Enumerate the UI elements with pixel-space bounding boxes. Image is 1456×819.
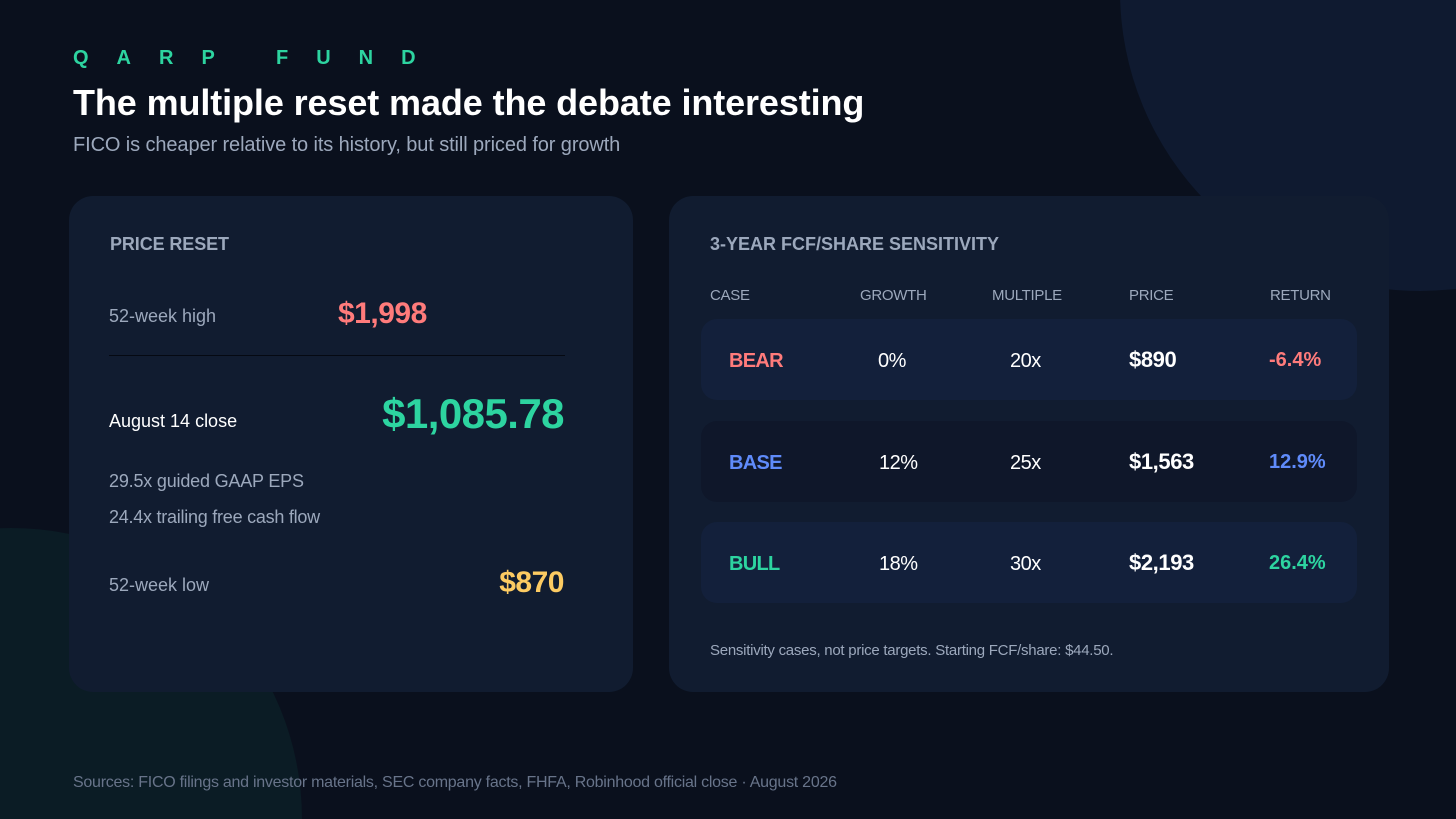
row: bear xyxy=(701,319,1357,400)
panel heading: price reset: PRICE RESET xyxy=(110,234,229,254)
title: The multiple reset made the debate interesting xyxy=(73,82,864,123)
return: bear: -6.4% xyxy=(1269,349,1321,371)
header: return: RETURN xyxy=(1270,287,1331,304)
header: multiple: MULTIPLE xyxy=(992,287,1062,304)
label: 52-week high: 52-week high xyxy=(109,306,216,326)
price: bull: $2,193 xyxy=(1129,550,1194,575)
metric: trailing FCF multiple: 24.4x trailing free cash flow xyxy=(109,507,320,527)
sources footer: Sources: FICO filings and investor materials, SEC company facts, FHFA, Robinhood official close · August 2026 xyxy=(73,774,837,791)
case: base: BASE xyxy=(729,452,782,474)
growth: bull: 18% xyxy=(879,553,918,575)
case: bear: BEAR xyxy=(729,350,783,372)
header: price: PRICE xyxy=(1129,287,1173,304)
growth: bear: 0% xyxy=(878,350,906,372)
panel heading: sensitivity: 3-YEAR FCF/SHARE SENSITIVITY xyxy=(710,234,999,254)
panel: price reset xyxy=(69,196,633,692)
table header xyxy=(710,287,1331,304)
decorative circle: top right xyxy=(1120,0,1456,291)
value: 52-week high: $1,998 xyxy=(338,297,427,330)
multiple: base: 25x xyxy=(1010,452,1041,474)
panel: sensitivity table xyxy=(669,196,1389,692)
subtitle: FICO is cheaper relative to its history, but still priced for growth xyxy=(73,134,620,156)
decorative circle: bottom left xyxy=(0,528,302,819)
case: bull: BULL xyxy=(729,553,780,575)
price: base: $1,563 xyxy=(1129,449,1194,474)
price: bear: $890 xyxy=(1129,347,1176,372)
header: growth: GROWTH xyxy=(860,287,927,304)
label: August 14 close: August 14 close xyxy=(109,411,237,431)
divider line xyxy=(109,355,565,356)
return: base: 12.9% xyxy=(1269,451,1326,473)
multiple: bear: 20x xyxy=(1010,350,1041,372)
header: case: CASE xyxy=(710,287,750,304)
value: August 14 close: $1,085.78 xyxy=(382,390,564,437)
metric: guided GAAP EPS multiple: 29.5x guided GAAP EPS xyxy=(109,471,304,491)
value: 52-week low: $870 xyxy=(499,566,564,599)
multiple: bull: 30x xyxy=(1010,553,1041,575)
footnote: Sensitivity cases, not price targets. Starting FCF/share: $44.50. xyxy=(710,642,1113,659)
row: base xyxy=(701,421,1357,502)
row: bull xyxy=(701,522,1357,603)
return: bull: 26.4% xyxy=(1269,552,1326,574)
label: 52-week low: 52-week low xyxy=(109,575,209,595)
growth: base: 12% xyxy=(879,452,918,474)
